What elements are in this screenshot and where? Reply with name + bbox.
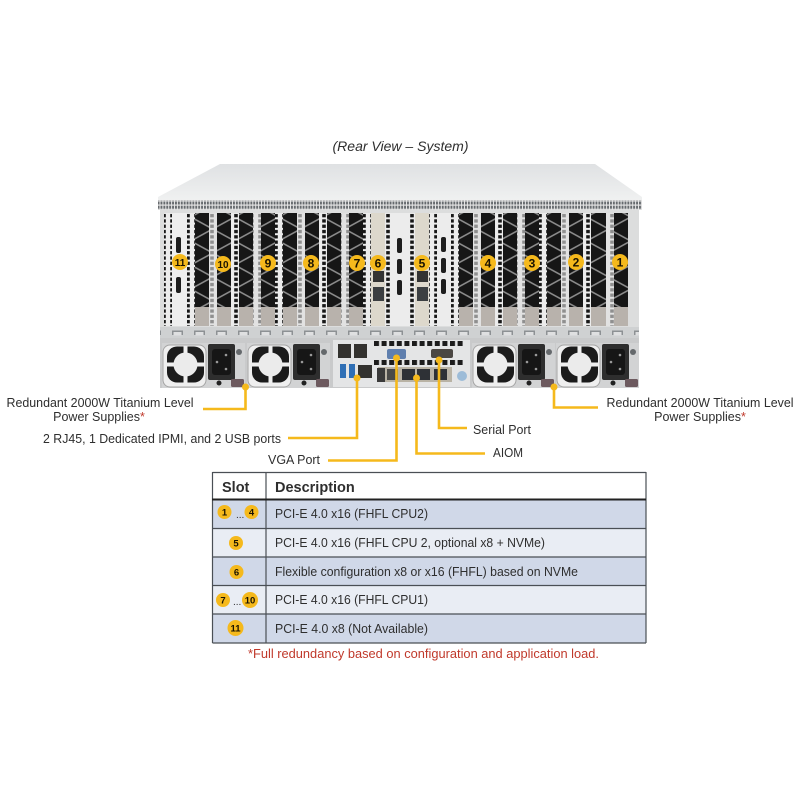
slot number badges: 3 (529, 256, 536, 270)
table row backgrounds (212, 472, 646, 643)
callout: power supplies right (550, 384, 794, 424)
power supply 4 (556, 343, 639, 388)
row: slot 5: PCI-E 4.0 x16 (FHFL CPU 2, optional x8 + NVMe) (275, 536, 545, 550)
table header: Description (275, 480, 355, 496)
slot number badges: 10 (217, 260, 229, 271)
callout: serial port (436, 356, 532, 437)
perforated slot dividers (164, 213, 614, 326)
row: slots 1 to 4: PCI-E 4.0 x16 (FHFL CPU2) (275, 507, 428, 521)
chassis body (160, 210, 639, 340)
row: slot 11 (228, 620, 428, 636)
row: slots 1 to 4: ... (236, 510, 244, 521)
ventilation strip (158, 200, 642, 210)
row: slots 1 to 4 (218, 505, 428, 521)
row: slots 7 to 10: PCI-E 4.0 x16 (FHFL CPU1) (275, 593, 428, 607)
PCIe slot bay right (455, 213, 628, 326)
row: slot 6: 6 (234, 568, 239, 578)
callout: AIOM (413, 374, 523, 460)
row: slots 7 to 10: 7 (220, 596, 226, 606)
callout: AIOM: AIOM (493, 446, 523, 460)
row: slot 11: 11 (230, 624, 241, 634)
chassis top cover (158, 164, 642, 201)
slot table (212, 472, 646, 643)
footnote: *Full redundancy based on configuration and application load. (248, 647, 599, 661)
slot number badges: 4 (485, 256, 492, 270)
slot number badges: 8 (308, 256, 315, 270)
power supply 3 (472, 343, 555, 388)
callout: power supplies right: Power Supplies* (654, 410, 746, 424)
blank bracket with vents (393, 213, 409, 326)
slot number badges: 5 (419, 256, 426, 270)
power supply 1 (162, 343, 245, 388)
slot number badges: 11 (175, 258, 186, 269)
power supply 2 (247, 343, 330, 388)
row: slots 1 to 4: 4 (249, 508, 255, 518)
VGA port (387, 349, 406, 359)
callout: VGA port: VGA Port (268, 453, 321, 467)
row: slots 7 to 10: ... (233, 597, 241, 608)
callout: power supplies right: Redundant 2000W Titanium Level (606, 396, 794, 410)
slot number badges: 2 (573, 256, 580, 270)
row: slots 1 to 4: 1 (222, 508, 228, 518)
row: slot 6: Flexible configuration x8 or x16 (FHFL) based on NVMe (275, 565, 578, 579)
PCIe slot bay left (187, 213, 367, 326)
callout: serial port: Serial Port (473, 423, 532, 437)
row: slots 7 to 10 (216, 592, 428, 608)
callout: power supplies left: Power Supplies* (53, 410, 145, 424)
row: slot 5: 5 (233, 538, 239, 550)
callout: power supplies left (6, 384, 249, 424)
lower section background (160, 338, 639, 388)
callout: RJ45 and USB ports: 2 RJ45, 1 Dedicated IPMI, and 2 USB ports (43, 432, 281, 446)
slot 6 card bracket (371, 213, 386, 326)
serial port (431, 349, 453, 358)
row: slot 11: PCI-E 4.0 x8 (Not Available) (275, 622, 428, 636)
AIOM card (377, 367, 452, 382)
rear I/O panel (333, 340, 470, 387)
slot number badges: 7 (354, 256, 361, 270)
slot number badges: 6 (375, 256, 382, 270)
callout: VGA port (268, 354, 400, 467)
slot number badges: 9 (265, 256, 272, 270)
slot number badges: 1 (617, 256, 624, 270)
row: slots 7 to 10: 10 (245, 596, 255, 606)
thumb screw (457, 371, 467, 381)
table header (222, 480, 355, 496)
USB ports (340, 364, 355, 378)
server chassis rear view (158, 164, 642, 388)
slot 11 blank bracket (172, 213, 187, 326)
slot number badges (172, 254, 628, 272)
bracket tabs row (160, 327, 639, 338)
callout: power supplies left: Redundant 2000W Titanium Level (6, 396, 194, 410)
table grid (212, 472, 646, 643)
title: (Rear View – System) (332, 138, 468, 154)
table header: Slot (222, 480, 250, 496)
blank bracket with vents (437, 213, 453, 326)
RJ45 ports (338, 344, 372, 378)
slot 5 card bracket (415, 213, 432, 326)
callout: RJ45 and USB ports (43, 374, 360, 446)
